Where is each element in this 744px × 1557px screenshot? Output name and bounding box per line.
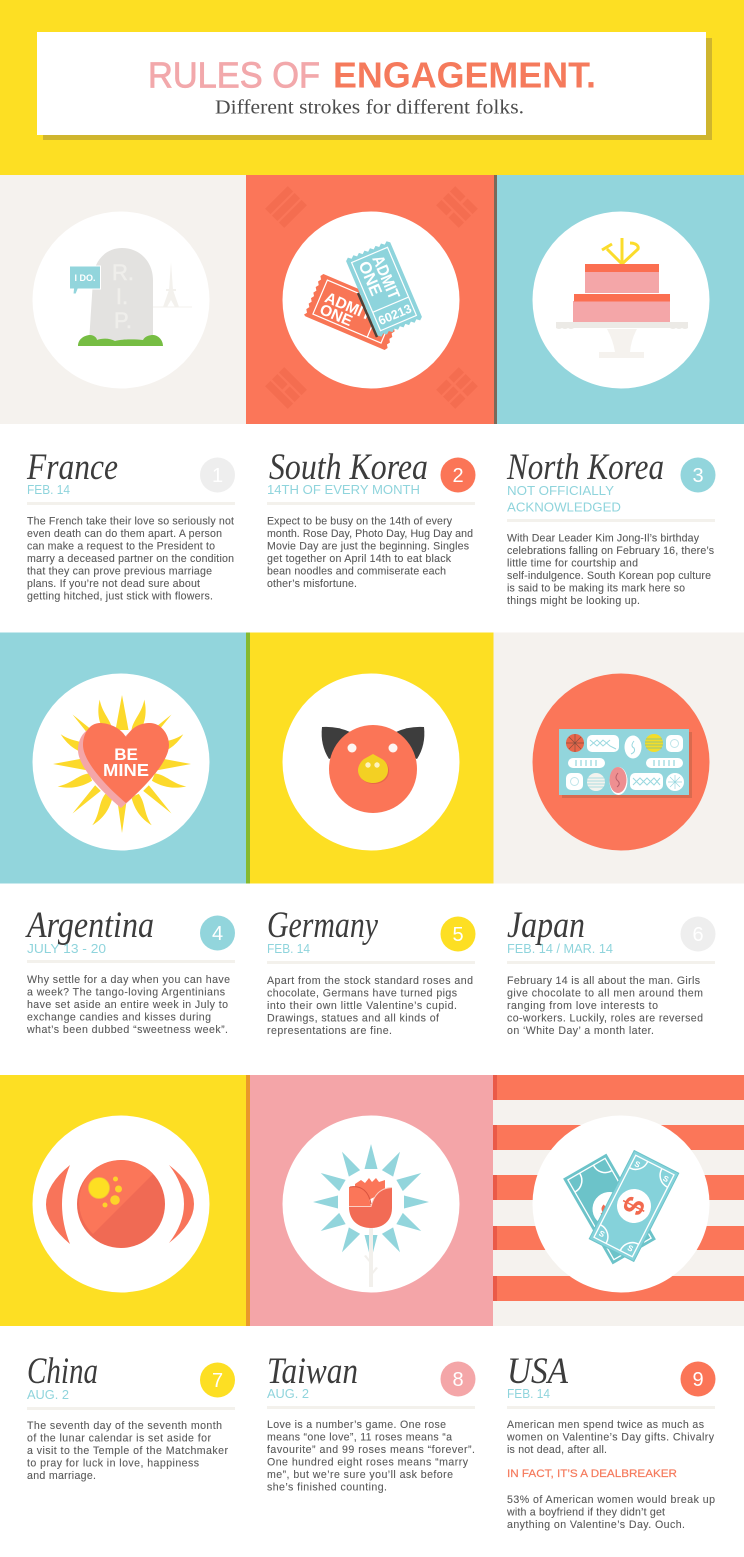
panel: Japan illustration — [494, 632, 744, 884]
icon: sun rays — [53, 695, 191, 833]
text block: Argentina: JULY 13 - 20 — [27, 941, 106, 956]
badge 4 — [200, 916, 235, 950]
text block: Argentina: Argentina — [24, 905, 154, 946]
badge 3 — [680, 458, 716, 492]
title — [148, 54, 596, 96]
icon: rose — [349, 1178, 392, 1287]
icon: gravestone — [89, 248, 153, 342]
icon: coral ticket: ONE — [317, 301, 355, 330]
text block: France: even death can do them apart. A person — [27, 528, 222, 540]
text block: USA: is not dead, after all. — [507, 1444, 607, 1456]
panel: France illustration — [0, 175, 246, 424]
icon: grass — [78, 335, 163, 346]
text block: USA: USA — [507, 1351, 568, 1392]
text block: Argentina: have set aside an entire week in July to — [27, 999, 228, 1011]
text block: South Korea: Expect to be busy on the 14th of every — [267, 516, 453, 528]
text block: China: and marriage. — [27, 1470, 96, 1482]
subtitle: Different strokes for different folks. — [215, 96, 524, 118]
text block: Germany: chocolate, Germans have turned pigs — [267, 988, 457, 1000]
text block: China: a visit to the Temple of the Matchmaker — [27, 1445, 228, 1457]
text block: Argentina: what’s been dubbed “sweetness week”. — [26, 1024, 228, 1036]
text block: South Korea: other’s misfortune. — [267, 578, 357, 590]
icon: flag orb — [77, 1160, 165, 1248]
badge 8: 8 — [452, 1369, 464, 1391]
panel: Germany illustration — [250, 632, 494, 884]
text block: Taiwan — [267, 1351, 476, 1494]
text block: Japan: on ‘White Day’ a month later. — [507, 1025, 654, 1037]
text block: Taiwan: AUG. 2 — [267, 1386, 309, 1401]
text block: France: marry a deceased partner on the condition — [27, 553, 234, 565]
text block: Germany: into their own little Valentine’s cupid. — [267, 1000, 457, 1012]
badge 5: 5 — [452, 924, 464, 946]
header banner — [0, 0, 744, 175]
icon: cake — [556, 238, 688, 358]
icon: pig — [322, 725, 424, 813]
text block: China: China — [27, 1351, 98, 1392]
text block: Germany — [267, 905, 476, 1037]
badge 3: 3 — [692, 465, 704, 487]
panel: Argentina illustration — [0, 632, 250, 884]
badge 6: 6 — [692, 924, 704, 946]
title: ENGAGEMENT. — [333, 54, 596, 96]
icon: teal ticket: 60213 — [376, 302, 414, 328]
badge 1: 1 — [212, 465, 223, 487]
icon: front banknote: S — [597, 1229, 607, 1239]
panel: South Korea illustration — [246, 175, 497, 424]
text block: Japan: ranging from love interests to — [507, 1000, 658, 1012]
text block: Japan: February 14 is all about the man. Girls — [507, 975, 700, 987]
text block: Argentina: a week? The tango-loving Argentinians — [27, 986, 225, 998]
text block: Germany: FEB. 14 — [267, 941, 310, 956]
text block: North Korea: things might be looking up. — [507, 595, 640, 607]
badge 4: 4 — [212, 923, 223, 945]
panel: China illustration — [0, 1075, 250, 1326]
text block: Taiwan: One hundred eight roses means “marry — [267, 1456, 469, 1468]
icon: coral ticket — [304, 273, 404, 351]
text block: Japan: co-workers. Luckily, roles are reversed — [507, 1012, 703, 1024]
text block: North Korea: is said to be making its mark here so — [507, 582, 685, 594]
icon: flag sun rays — [313, 1144, 429, 1260]
icon: teal ticket: ADMIT — [368, 253, 403, 302]
text block: North Korea — [506, 447, 716, 607]
text block: South Korea: South Korea — [269, 447, 428, 488]
badge 9 — [680, 1362, 716, 1396]
text block: North Korea: little time for courtship and — [507, 558, 638, 570]
panel: USA illustration — [493, 1075, 744, 1326]
text block: North Korea: celebrations falling on February 16, there’s — [507, 545, 714, 557]
text block: North Korea: With Dear Leader Kim Jong-Il’s birthday — [507, 532, 700, 544]
icon: gravestone: I. — [116, 284, 128, 309]
text block: Taiwan: she’s finished counting. — [267, 1482, 387, 1494]
text block: USA: anything on Valentine’s Day. Ouch. — [507, 1519, 685, 1531]
icon: candy heart: MINE — [103, 760, 149, 780]
badge 6 — [680, 916, 716, 952]
icon: front banknote: S — [633, 1159, 642, 1170]
text block: USA — [506, 1351, 716, 1531]
text block: North Korea: self-indulgence. South Korean pop culture — [507, 570, 711, 582]
text block: China: The seventh day of the seventh month — [27, 1420, 222, 1432]
text block: USA: FEB. 14 — [507, 1386, 550, 1401]
text block: North Korea: ACKNOWLEDGED — [507, 500, 621, 514]
text block: South Korea: month. Rose Day, Photo Day, Hug Day and — [267, 528, 473, 540]
text block: South Korea: get together on April 14th to eat black — [267, 553, 452, 565]
icon: ticket shadow — [358, 293, 377, 337]
icon: crescents — [46, 1165, 194, 1244]
panel: Taiwan illustration — [250, 1075, 494, 1326]
text block: USA: 53% of American women would break up — [507, 1494, 715, 1506]
badge 7 — [200, 1362, 235, 1398]
text block: France: FEB. 14 — [27, 482, 70, 497]
text block: Germany: Germany — [267, 905, 378, 946]
badge 8 — [440, 1362, 476, 1396]
text block: Japan: FEB. 14 / MAR. 14 — [507, 941, 613, 956]
text block: Germany: Apart from the stock standard roses and — [267, 975, 473, 987]
text block: Argentina — [24, 905, 235, 1036]
text block: Germany: representations are fine. — [267, 1025, 392, 1037]
text block: Japan: give chocolate to all men around them — [507, 988, 703, 1000]
panel: North Korea illustration — [497, 175, 744, 424]
text block: USA: American men spend twice as much as — [507, 1419, 704, 1431]
badge 9: 9 — [692, 1369, 704, 1391]
text block: Japan — [507, 905, 716, 1037]
icon: candy box — [559, 729, 692, 798]
text block: Japan: Japan — [507, 905, 585, 946]
badge 5 — [440, 916, 476, 952]
icon: teal ticket — [345, 240, 423, 338]
text block: France: plans. If you’re not dead sure about — [27, 578, 200, 590]
badge 1 — [200, 458, 235, 492]
text block: South Korea: bean noodles and commiserate each — [267, 566, 446, 578]
text block: South Korea: Movie Day are just the beginning. Singles — [267, 540, 469, 552]
text block: Taiwan: favourite” and 99 roses means “forever”. — [267, 1444, 475, 1456]
text block: USA: women on Valentine’s Day gifts. Chivalry — [506, 1432, 715, 1444]
text block: South Korea — [267, 447, 476, 590]
icon: candy heart — [78, 723, 169, 808]
icon: back banknote — [563, 1154, 656, 1264]
icon: gravestone: P. — [114, 308, 132, 333]
icon: front banknote: $ — [615, 1191, 651, 1220]
icon: candy heart: BE — [114, 745, 138, 764]
icon: Eiffel tower — [153, 262, 192, 308]
icon: front banknote: S — [626, 1243, 635, 1254]
text block: Germany: Drawings, statues and all kinds of — [267, 1012, 439, 1024]
text block: France: that they can prove previous marriage — [27, 566, 212, 578]
icon: speech bubble — [70, 266, 100, 294]
text block: Argentina: Why settle for a day when you can have — [27, 974, 230, 986]
text block: France: getting hitched, just stick with flowers. — [27, 590, 213, 602]
icon: flag trigrams — [265, 186, 478, 409]
text block: North Korea: North Korea — [506, 447, 664, 488]
text block: Taiwan: Taiwan — [267, 1351, 358, 1392]
text block: France — [26, 447, 235, 602]
text block: China: to pray for luck in love, happiness — [27, 1458, 199, 1470]
text block: South Korea: 14TH OF EVERY MONTH — [267, 482, 420, 497]
text block: Taiwan: means “one love”, 11 roses means “a — [267, 1432, 452, 1444]
text block: China — [27, 1351, 235, 1482]
badge 2 — [440, 458, 476, 492]
badge 7: 7 — [212, 1370, 223, 1392]
text block: USA: with a boyfriend if they didn’t get — [506, 1506, 665, 1518]
text block: France: The French take their love so seriously not — [27, 516, 234, 528]
title: RULES OF — [148, 54, 320, 96]
text block: France: can make a request to the President to — [27, 540, 215, 552]
text block: France: France — [26, 447, 118, 488]
text block: China: AUG. 2 — [27, 1387, 69, 1402]
icon: coral ticket: ADMIT — [322, 289, 375, 324]
text block: Taiwan: me”, but we’re sure you’ll ask before — [267, 1469, 453, 1481]
text block: Taiwan: Love is a number’s game. One rose — [267, 1419, 446, 1431]
icon: teal ticket: ONE — [355, 259, 385, 299]
text block: North Korea: NOT OFFICIALLY — [507, 483, 614, 498]
icon: front banknote: S — [661, 1174, 671, 1184]
icon: gravestone: R. — [112, 260, 134, 285]
icon: speech bubble: I DO. — [74, 273, 96, 283]
callout: IN FACT, IT’S A DEALBREAKER — [507, 1468, 677, 1480]
text block: China: of the lunar calendar is set aside for — [27, 1432, 211, 1444]
icon: back banknote: $ — [594, 1195, 627, 1223]
text block: Argentina: exchange candies and kisses during — [27, 1012, 211, 1024]
badge 2: 2 — [452, 465, 464, 487]
icon: front banknote — [589, 1151, 679, 1261]
